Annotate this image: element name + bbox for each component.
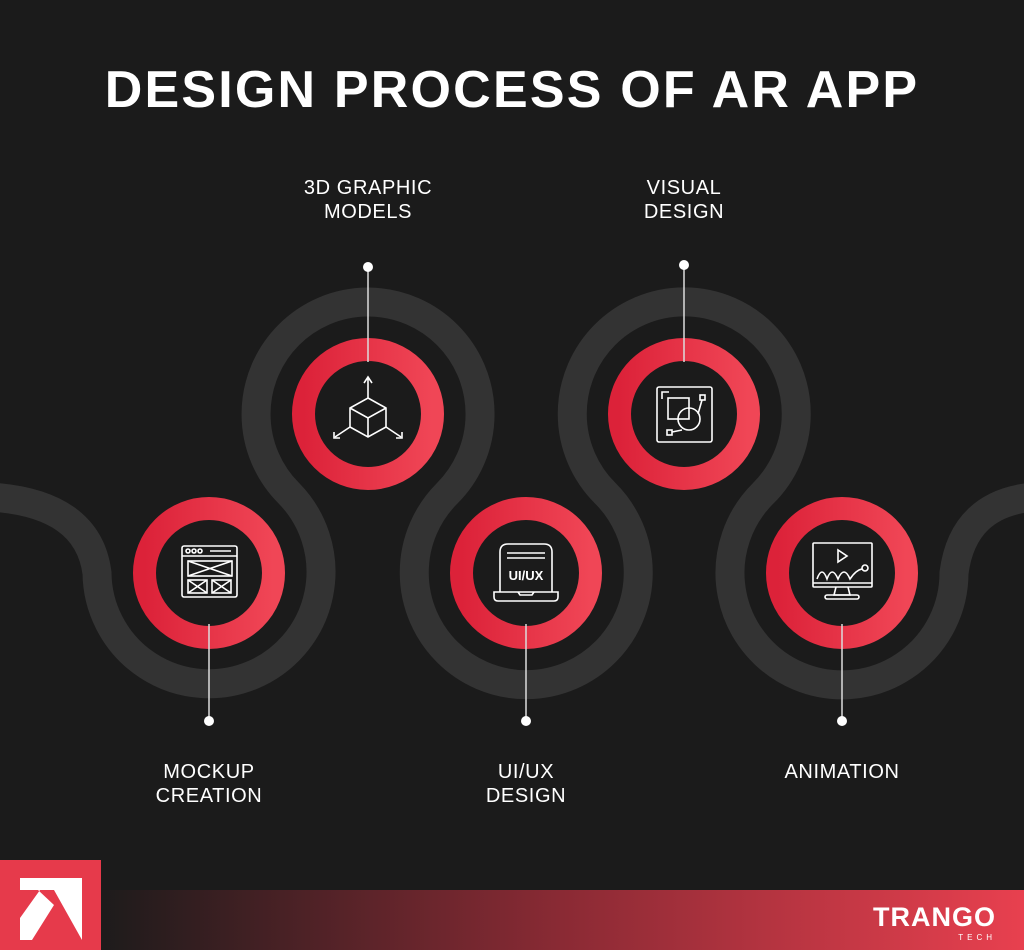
label: mockup creation: MOCKUP <box>163 761 255 783</box>
gray track path <box>0 302 1024 685</box>
icon: wireframe <box>182 546 237 597</box>
step 5: animation <box>778 508 906 726</box>
step 4: visual design <box>620 260 748 478</box>
footer band <box>100 890 1024 950</box>
step 3: ui/ux design: UI/UX <box>509 568 544 583</box>
icon: laptop ui/ux <box>494 544 558 601</box>
label: ui/ux design: UI/UX <box>498 761 554 783</box>
brand: trango tech: TRANGO <box>873 902 996 932</box>
brand: trango tech: TECH <box>958 933 996 942</box>
label: visual design: DESIGN <box>644 201 724 223</box>
label: ui/ux design: DESIGN <box>486 785 566 807</box>
label: mockup creation: CREATION <box>156 785 262 807</box>
label: visual design: VISUAL <box>647 177 721 199</box>
label: 3d graphic models: MODELS <box>324 201 412 223</box>
label: 3d graphic models: 3D GRAPHIC <box>304 177 432 199</box>
step 3: ui/ux design <box>462 508 590 726</box>
logo mark <box>0 860 101 950</box>
step 2: 3d graphic models <box>304 262 432 478</box>
icon: cube <box>334 377 402 438</box>
label: animation: ANIMATION <box>784 761 900 783</box>
icon: shapes <box>657 387 712 442</box>
title: DESIGN PROCESS OF AR APP <box>105 61 919 119</box>
step 1: mockup creation <box>144 508 274 726</box>
icon: monitor animation <box>813 543 872 599</box>
